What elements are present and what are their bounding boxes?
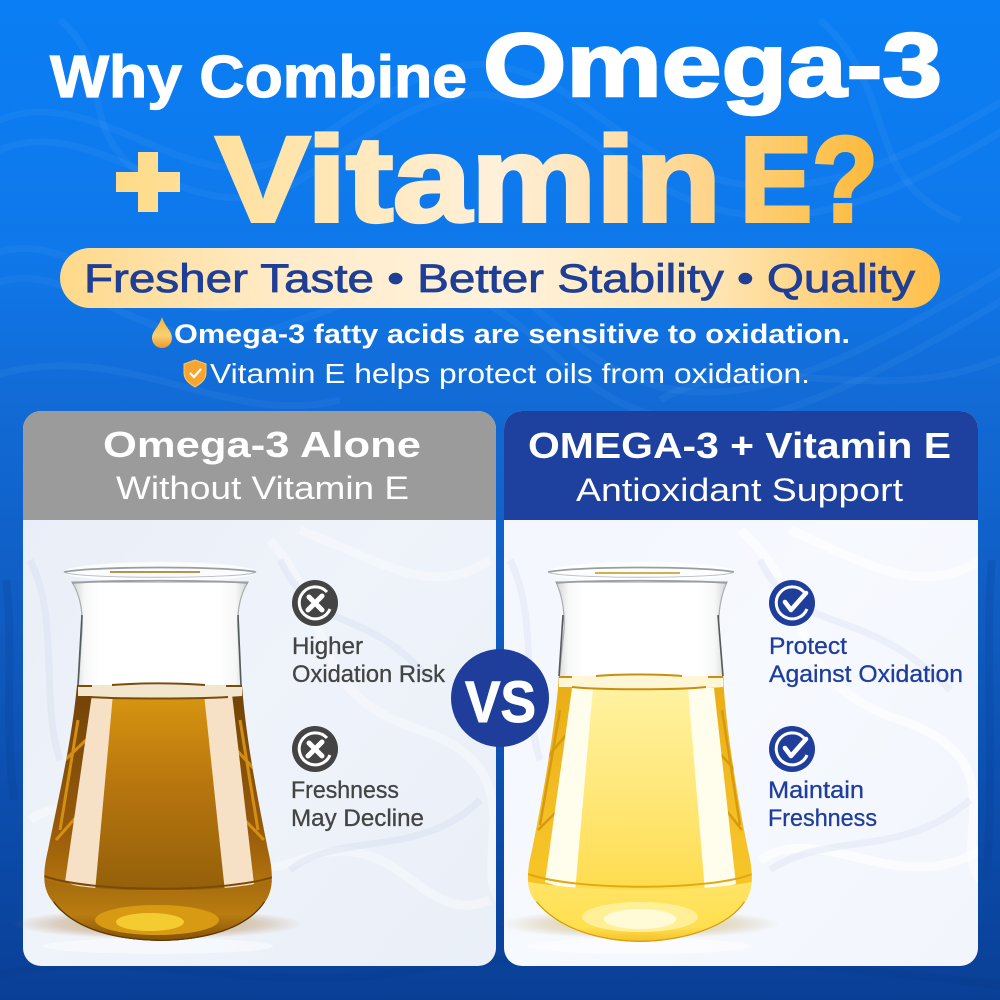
flask shadow (500, 909, 780, 939)
icon: oil drop (152, 317, 172, 348)
point: higher oxidation risk (292, 580, 446, 688)
glass rim (64, 562, 256, 583)
bowl highlight (582, 902, 698, 932)
side streaks (56, 720, 264, 840)
bowl rim line (44, 876, 276, 889)
icon: check in circle (769, 580, 815, 626)
panel header: navy: OMEGA-3 + Vitamin E (528, 425, 951, 466)
point: freshness may decline: May Decline (291, 805, 424, 832)
bowl rim line (528, 874, 752, 887)
liquid surface (559, 676, 723, 689)
point: protect against oxidation: Protect (769, 633, 847, 660)
panel: omega-3 alone (23, 411, 500, 966)
word: Vitamin: Vitamin (216, 111, 721, 247)
statement: vitamin E protection: Vitamin E helps protect oils from oxidation. (210, 358, 810, 389)
point: higher oxidation risk: Higher (292, 633, 363, 660)
bowl highlight (95, 905, 219, 935)
neck dark edges (559, 615, 723, 676)
flask: dark amber oil (12, 562, 304, 954)
VS badge (451, 649, 549, 747)
reflection right (204, 694, 254, 892)
VS badge: VS (465, 670, 536, 735)
banner pill: Fresher Taste • Better Stability • Quality (84, 257, 915, 301)
title line: Why Combine: Why Combine (50, 44, 467, 110)
statement: omega-3 oxidation: Omega-3 fatty acids are sensitive to oxidation. (174, 319, 850, 349)
liquid core (96, 699, 224, 890)
icon: x in circle (292, 726, 338, 772)
flask: golden oil (500, 562, 780, 954)
panel header: navy (504, 411, 978, 520)
plus sign (116, 152, 180, 212)
title line: plus Vitamin E? (116, 111, 878, 247)
glass neck (556, 582, 727, 680)
panel header: grey (23, 411, 496, 520)
point: freshness may decline (291, 726, 424, 832)
title (50, 16, 942, 247)
point: maintain freshness: Maintain (768, 777, 864, 804)
bottom edge (53, 902, 265, 941)
reflection left (65, 694, 113, 892)
reflection left (545, 688, 593, 892)
icon: check in circle (769, 726, 815, 772)
panel header: navy: Antioxidant Support (576, 472, 903, 508)
point: maintain freshness: Freshness (768, 805, 877, 832)
banner pill (60, 248, 940, 308)
point: protect against oxidation: Against Oxidation (769, 661, 963, 688)
point: freshness may decline: Freshness (291, 777, 399, 804)
panel: omega-3 plus vitamin E (504, 411, 980, 966)
flask shadow (12, 909, 304, 939)
word: E?: E? (740, 111, 878, 247)
liquid surface (78, 685, 242, 698)
reflection right (688, 688, 736, 892)
reflection (528, 938, 752, 954)
glass rim (548, 562, 734, 583)
reflection (43, 938, 273, 954)
bottom edge (536, 902, 745, 942)
icon: orange shield (184, 360, 206, 387)
bowl (44, 879, 272, 941)
glass neck (72, 582, 248, 690)
liquid core (570, 688, 712, 890)
neck dark edges (78, 615, 241, 685)
liquid (520, 672, 760, 947)
panel header: grey: Without Vitamin E (116, 470, 409, 506)
icon: x in circle (292, 580, 338, 626)
panel header: grey: Omega-3 Alone (103, 424, 421, 465)
bowl (528, 882, 752, 942)
side streaks (538, 710, 742, 830)
point: maintain freshness (768, 726, 877, 832)
point: higher oxidation risk: Oxidation Risk (292, 661, 446, 688)
liquid (40, 680, 280, 945)
point: protect against oxidation (769, 580, 963, 688)
title line: Omega-3: Omega-3 (483, 16, 942, 116)
